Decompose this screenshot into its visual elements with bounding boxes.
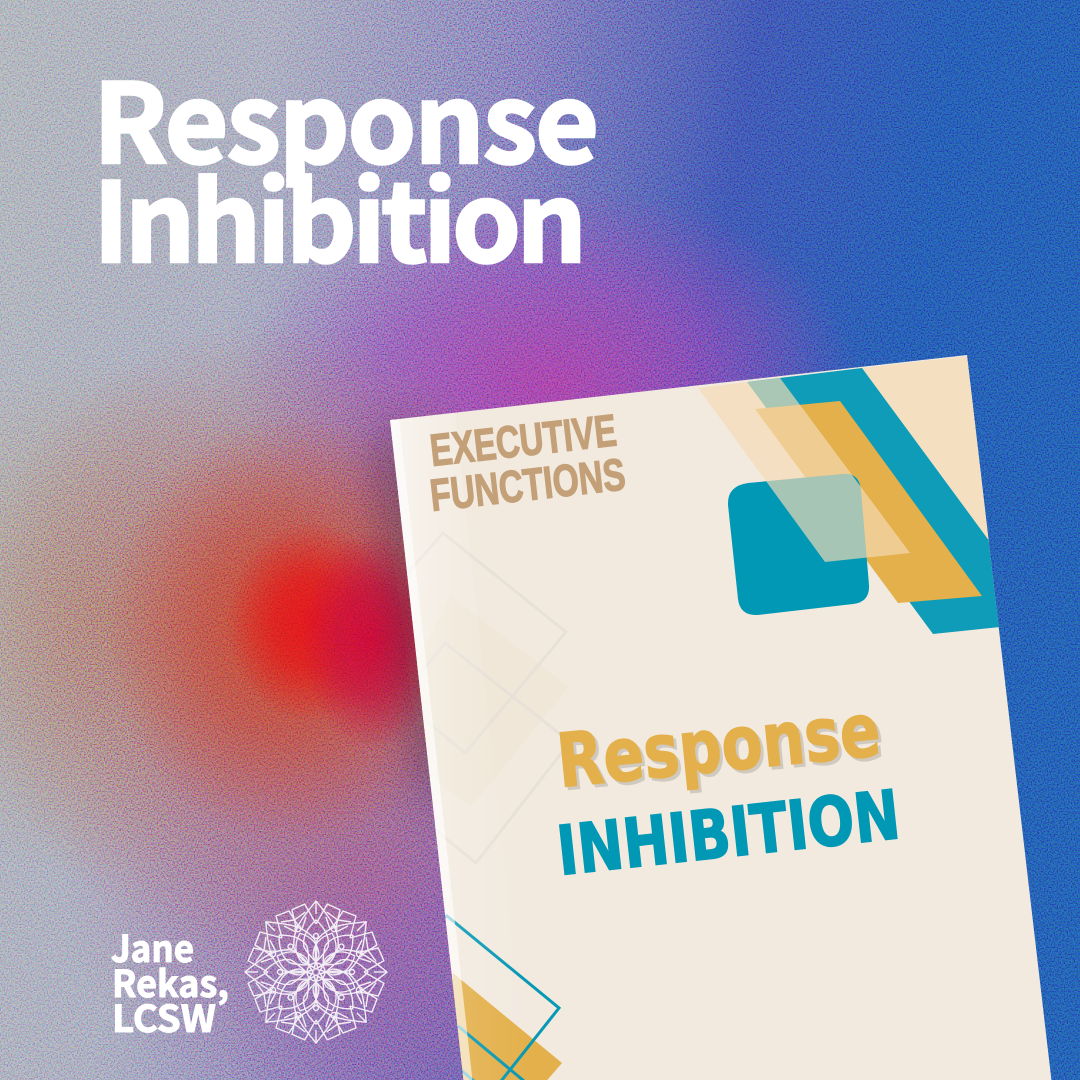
teal outlined diamond — [445, 914, 561, 1080]
gold diamond bottom — [440, 973, 562, 1080]
spine soft highlight — [390, 416, 508, 1080]
book — [340, 355, 1052, 1080]
translucent peach overlay — [698, 378, 910, 562]
faint filled diamond — [417, 664, 430, 776]
book title: inhibition: INHIBITION — [553, 776, 904, 892]
title: Response — [93, 35, 599, 195]
title — [93, 35, 599, 294]
icon: mandala logo — [238, 894, 394, 1050]
book title: response: Response — [556, 690, 887, 808]
faint outlined diamond upper — [406, 533, 568, 720]
cover artwork — [340, 356, 1000, 1080]
author name — [111, 919, 229, 1043]
label: executive functions: EXECUTIVE — [427, 404, 619, 476]
label: executive functions — [427, 404, 628, 521]
author name: Jane — [111, 919, 194, 973]
book title: response: Response — [553, 687, 884, 805]
author name: Rekas, — [112, 954, 229, 1008]
author name: LCSW — [112, 989, 216, 1043]
book cover — [390, 355, 1052, 1080]
gold band — [755, 401, 982, 603]
teal rounded square — [728, 474, 869, 615]
book shadow — [376, 425, 470, 800]
faint outlined diamond lower — [418, 674, 562, 865]
label: executive functions: FUNCTIONS — [427, 448, 628, 521]
teal band — [747, 368, 1000, 634]
title: Inhibition — [93, 134, 587, 294]
spine bright edge — [390, 419, 473, 1080]
peach corner — [862, 356, 990, 545]
lower teal line — [458, 1026, 530, 1080]
